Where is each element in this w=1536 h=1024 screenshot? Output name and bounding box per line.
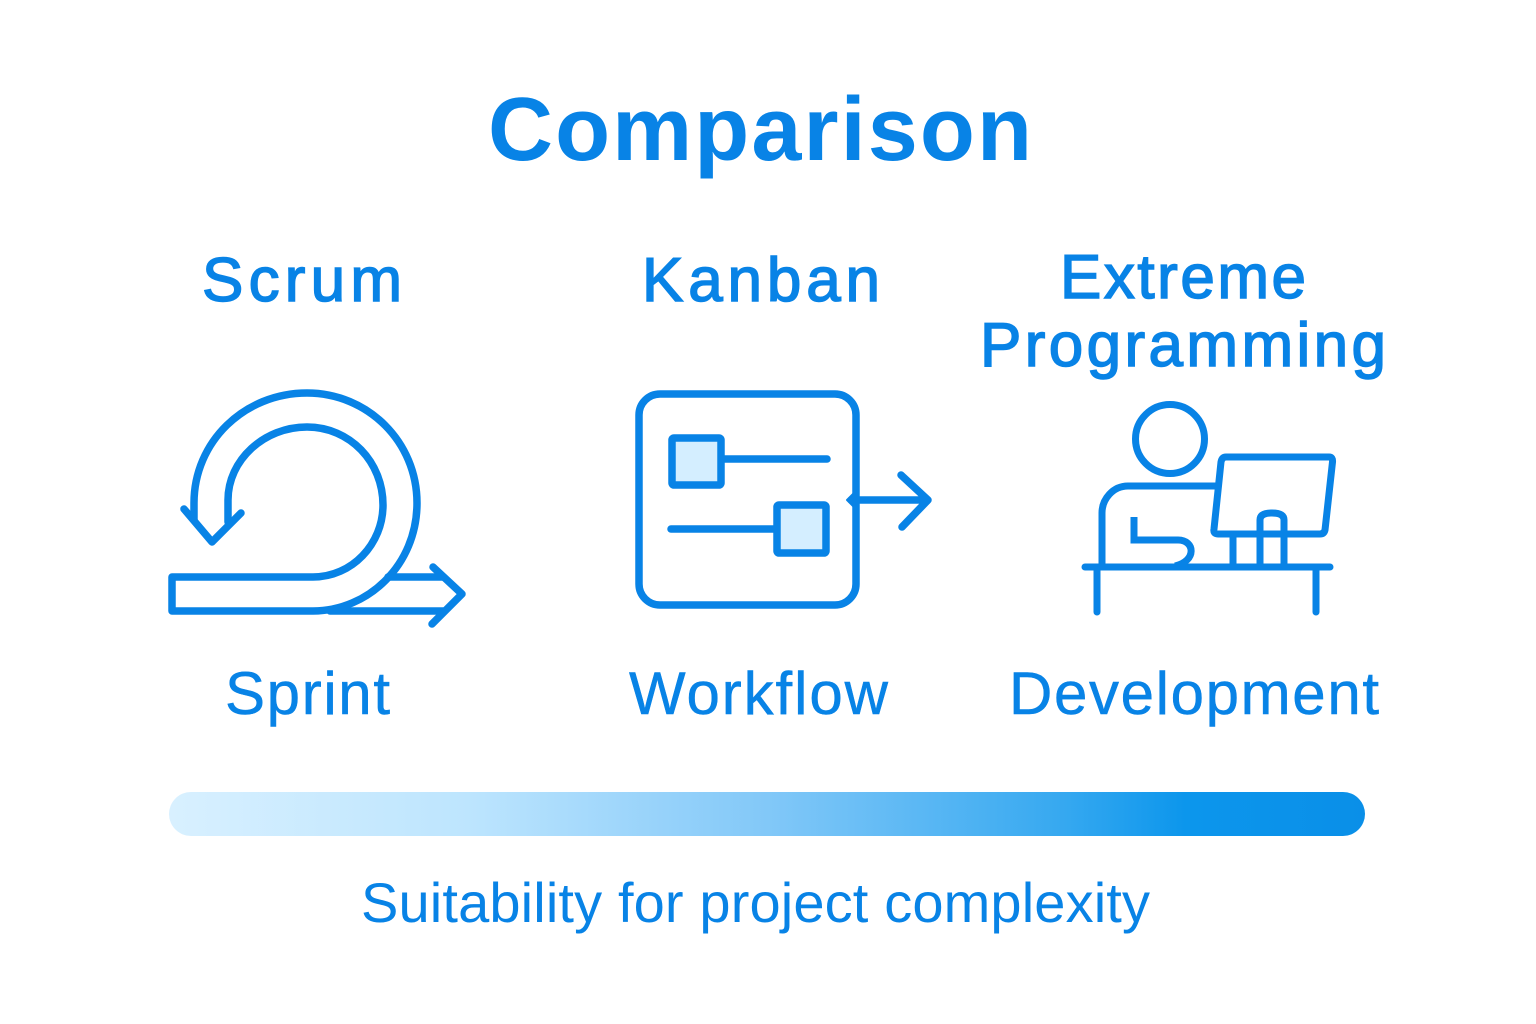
label: Workflow: Workflow: [629, 660, 889, 727]
heading: Scrum: Scrum: [202, 246, 402, 315]
title: Comparison: [488, 80, 1032, 180]
arrow: outgoing flow: [851, 475, 928, 527]
icon: Scrum sprint loop arrow: [172, 393, 462, 624]
label: Sprint: Sprint: [225, 660, 390, 727]
label: Development: Development: [1009, 660, 1379, 727]
gradient bar: complexity scale: [169, 792, 1365, 836]
heading: Extreme Programming: Extreme: [1060, 243, 1306, 312]
heading: Extreme Programming: Programming: [980, 311, 1386, 380]
card: upper task: [672, 438, 721, 485]
icon: developer at desk: [1085, 404, 1333, 612]
icon: Kanban workflow board: [639, 394, 928, 605]
heading: Extreme Programming: [980, 243, 1386, 380]
card: lower task: [777, 505, 826, 553]
heading: Kanban: Kanban: [642, 246, 880, 315]
caption: suitability: Suitability for project complexity: [361, 871, 1150, 934]
